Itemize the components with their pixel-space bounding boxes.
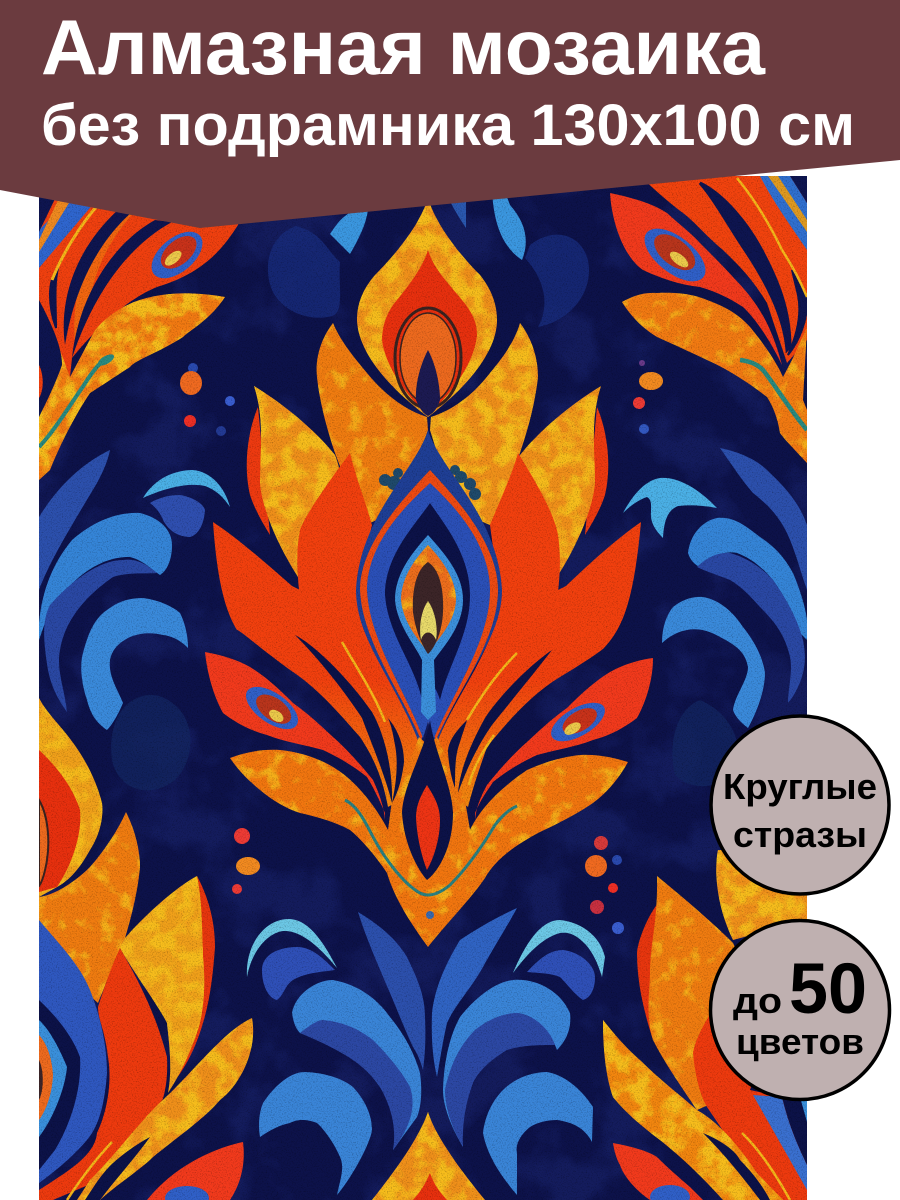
subheading: без подрамника 130х100 см: без подрамника 130х100 см <box>41 93 855 158</box>
lower blue leaves <box>247 908 605 1195</box>
top right corner flower <box>610 176 807 463</box>
peacock eye right <box>551 702 605 742</box>
small teal buds <box>379 465 481 500</box>
badge: up to 50 colours <box>710 920 890 1100</box>
navy slashes <box>295 635 552 803</box>
painting: flame lotus artwork <box>39 176 807 1200</box>
badge: up to 50 colours: цветов <box>736 1021 864 1062</box>
flame top <box>357 198 497 417</box>
badge: up to 50 colours: 50 <box>789 950 867 1029</box>
yellow accent lines <box>342 642 517 785</box>
centre drop <box>402 720 453 880</box>
teal veins lower <box>345 800 517 895</box>
petals: inner red <box>297 453 372 600</box>
badge: round rhinestones: Круглые <box>723 766 877 807</box>
bottom left flower <box>39 698 253 1200</box>
light blue top accents <box>330 192 526 260</box>
dots upper left and right <box>180 360 663 436</box>
petals: level three with red edge <box>247 407 270 535</box>
centre eye bands <box>356 430 502 745</box>
bottom right flower <box>603 850 807 1200</box>
lower orange leaves and spine <box>230 737 628 947</box>
wings: red <box>213 522 420 807</box>
centre lotus flower <box>205 198 653 947</box>
icon: peacock eye <box>152 232 202 278</box>
icon: peacock eye <box>644 228 706 282</box>
badge: round rhinestones: стразы <box>733 814 867 855</box>
right side blue feathers <box>623 448 807 728</box>
petals: level two <box>317 323 428 525</box>
feather left <box>205 652 385 820</box>
peacock eye left <box>246 686 298 730</box>
dots lower left and right <box>232 828 624 934</box>
feather right <box>475 658 653 820</box>
badge: round rhinestones <box>711 716 889 894</box>
bottom centre flame <box>372 1112 485 1200</box>
top left corner flower <box>39 200 238 480</box>
title banner <box>0 0 900 228</box>
left side blue feathers <box>39 450 230 730</box>
heading: Алмазная мозаика: Алмазная мозаика <box>41 3 766 91</box>
dark blue background blobs <box>111 226 739 790</box>
badge: up to 50 colours: до <box>733 980 782 1021</box>
